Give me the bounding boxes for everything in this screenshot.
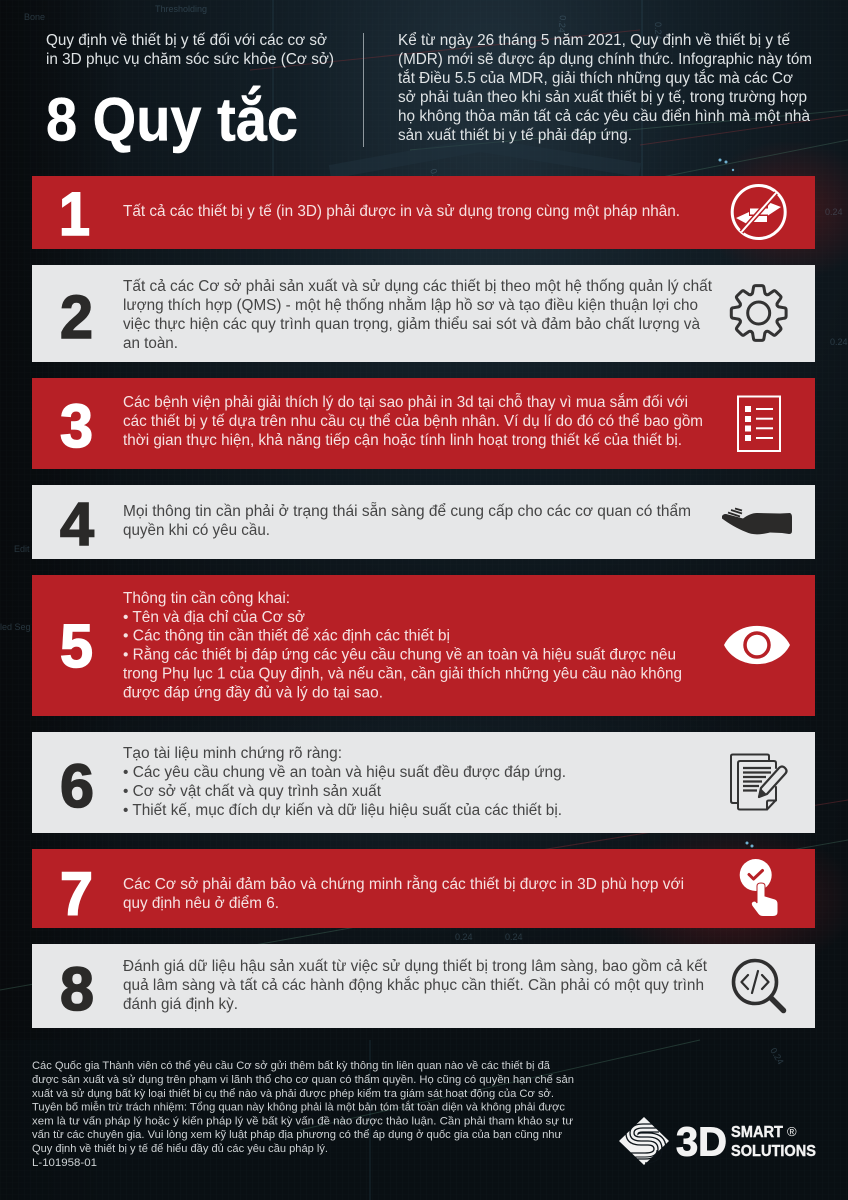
icon: open hand: [722, 508, 792, 534]
header: subtitle: [46, 32, 334, 68]
logo registered mark: ®: [787, 1124, 797, 1139]
rule 4 text: quyền khi có yêu cầu.: [123, 522, 270, 539]
rule 5 text: • Tên và địa chỉ của Cơ sở: [123, 609, 305, 626]
footer disclaimer text: Tuyên bố miễn trừ trách nhiệm: Tổng quan này không phải là một bản tóm tắt toàn diện và không phải được: [32, 1100, 565, 1114]
rule 2 text: Tất cả các Cơ sở phải sản xuất và sử dụng các thiết bị theo một hệ thống quản lý chất: [123, 278, 713, 295]
header divider: [363, 33, 364, 147]
footer disclaimer text: Các Quốc gia Thành viên có thể yêu cầu Cơ sở gửi thêm bất kỳ thông tin liên quan nào về các thiết bị đã: [32, 1060, 551, 1072]
number 1: 1: [59, 180, 90, 248]
rule 6 text: • Cơ sở vật chất và quy trình sản xuất: [123, 783, 382, 800]
background: dark technical scan interface: 0.24: [825, 207, 843, 217]
background: dark technical scan interface: Edit: [14, 544, 30, 554]
rule 2 text: [123, 278, 713, 352]
number 3: 3: [60, 392, 93, 460]
footer disclaimer text: xem là tư vấn pháp lý hoặc ý kiến pháp lý về bất kỳ vấn đề nào được thảo luận. Cần phải tham khảo sự tư: [32, 1116, 573, 1128]
header: subtitle: in 3D phục vụ chăm sóc sức khỏe (Cơ sở): [46, 51, 334, 68]
rule 5 text: [123, 590, 682, 702]
background: dark technical scan interface: 0.24: [455, 932, 473, 942]
icon: check and click hand: [740, 859, 778, 916]
rule 2 text: việc thực hiện các quy trình quan trọng, giảm thiểu sai sót và đảm bảo chất lượng và: [123, 316, 700, 333]
rule 3 text: Các bệnh viện phải giải thích lý do tại sao phải in 3d tại chỗ thay vì mua sắm đối với: [123, 394, 688, 411]
rule 5 text: Thông tin cần công khai:: [123, 590, 290, 607]
rule 7 text: quy định nêu ở điểm 6.: [123, 895, 279, 912]
rule 6 text: • Thiết kế, mục đích dự kiến và dữ liệu hiệu suất của các thiết bị.: [123, 802, 562, 819]
footer disclaimer text: xuất và sử dụng bất kỳ loại thiết bị cụ thể nào và phải được phép kiểm tra giám sát hoạt động của Cơ sở.: [32, 1088, 554, 1100]
footer disclaimer text: L-101958-01: [32, 1157, 97, 1169]
rule 3 text: các thiết bị y tế dựa trên nhu cầu cụ thể của bệnh nhân. Ví dụ lí do đó có thể bao gồm: [123, 413, 703, 430]
background: dark technical scan interface: 0.24: [653, 22, 663, 40]
logo: 3D Smart Solutions: [619, 1117, 816, 1165]
panel: rule 7: [32, 849, 815, 928]
rule 3 text: thời gian thực hiện, khả năng tiếp cận hoặc tính linh hoạt trong thiết kế của thiết bị.: [123, 432, 682, 449]
background: dark technical scan interface: 0.24: [556, 15, 568, 33]
rule 4 text: [123, 503, 691, 539]
icon: no transfer: [732, 186, 785, 238]
header: introduction text: (MDR) mới sẽ được áp dụng chính thức. Infographic này tóm: [398, 51, 812, 68]
title: 8 Quy tắc: [46, 86, 298, 154]
number 7: 7: [60, 860, 93, 928]
background: dark technical scan interface: 0.24: [830, 337, 848, 347]
rule 7 text: Các Cơ sở phải đảm bảo và chứng minh rằng các thiết bị được in 3D phù hợp với: [123, 876, 684, 893]
panel: rule 5: [32, 575, 815, 716]
background: dark technical scan interface: Thresholding: [155, 4, 207, 14]
logo mark: striped S diamond: [619, 1117, 669, 1165]
rule 6 text: [123, 745, 566, 819]
header: subtitle: Quy định về thiết bị y tế đối với các cơ sở: [46, 32, 327, 49]
logo wordmark: 3D: [676, 1118, 727, 1164]
rule 5 text: • Các thông tin cần thiết để xác định các thiết bị: [123, 628, 450, 644]
background: dark technical scan interface: Bone: [24, 12, 45, 22]
panel: rule 4: [32, 485, 815, 559]
rule 5 text: trong Phụ lục 1 của Quy định, và nếu cần, cần giải thích những yêu cầu nào không: [123, 666, 682, 682]
background: dark technical scan interface: 0.24: [768, 1046, 786, 1066]
rule 4 text: Mọi thông tin cần phải ở trạng thái sẵn sàng để cung cấp cho các cơ quan có thẩm: [123, 503, 691, 520]
header: introduction text: sở phải tuân theo khi sản xuất thiết bị y tế, trong trường hợp: [398, 89, 807, 106]
icon: magnifier with code: [734, 960, 784, 1010]
rule 8 text: đánh giá định kỳ.: [123, 996, 238, 1013]
panel: rule 8: [32, 944, 815, 1028]
header: introduction text: [398, 32, 812, 144]
number 4: 4: [60, 490, 94, 558]
logo text: solutions: SOLUTIONS: [731, 1143, 816, 1160]
panel: rule 3: [32, 378, 815, 469]
number 5: 5: [60, 612, 93, 680]
background: dark technical scan interface: 0.24: [428, 167, 444, 187]
rule 8 text: Đánh giá dữ liệu hậu sản xuất từ việc sử dụng thiết bị trong lâm sàng, bao gồm cả kết: [123, 958, 708, 975]
header: introduction text: Kể từ ngày 26 tháng 5 năm 2021, Quy định về thiết bị y tế: [398, 32, 790, 49]
rule 5 text: được đáp ứng đầy đủ và lý do tại sao.: [123, 684, 383, 702]
rule 1 text: Tất cả các thiết bị y tế (in 3D) phải được in và sử dụng trong cùng một pháp nhân.: [123, 203, 680, 220]
background: dark technical scan interface: 0.24: [505, 932, 523, 942]
logo text: smart: SMART: [731, 1124, 783, 1141]
icon: eye: [724, 626, 790, 664]
rule 2 text: lượng thích hợp (QMS) - một hệ thống nhằm lập hồ sơ và tạo điều kiện thuận lợi cho: [123, 297, 698, 314]
icon: document and pen: [731, 754, 786, 810]
footer disclaimer text: [32, 1060, 574, 1169]
rule 6 text: Tạo tài liệu minh chứng rõ ràng:: [123, 745, 342, 762]
rule 5 text: • Rằng các thiết bị đáp ứng các yêu cầu chung về an toàn và hiệu suất được nêu: [123, 646, 676, 664]
number 6: 6: [60, 752, 94, 820]
rule 2 text: an toàn.: [123, 335, 178, 352]
icon: gear: [731, 286, 786, 340]
panel: rule 6: [32, 732, 815, 833]
footer disclaimer text: được sản xuất và sử dụng trên phạm vi lãnh thổ cho cơ quan có thẩm quyền. Họ cũng có quyền hạn chế sản: [32, 1074, 574, 1086]
number 8: 8: [60, 955, 94, 1023]
header: introduction text: họ không thỏa mãn tất cả các yêu cầu điển hình mà một nhà: [398, 108, 810, 125]
header: introduction text: sản xuất thiết bị y tế phải đáp ứng.: [398, 127, 632, 144]
panel: rule 2: [32, 265, 815, 362]
rule 3 text: [123, 394, 703, 449]
rule 8 text: [123, 958, 708, 1013]
panel: rule 1: [32, 176, 815, 249]
footer disclaimer text: vấn từ các chuyên gia. Vui lòng xem kỹ luật pháp địa phương có thể áp dụng ở quốc gia của bạn cũng như: [32, 1129, 562, 1141]
icon: checklist: [738, 396, 780, 451]
rule 7 text: [123, 876, 684, 912]
footer disclaimer text: Quy định về thiết bị y tế để hiểu đầy đủ các yêu cầu pháp lý.: [32, 1143, 328, 1155]
background: dark technical scan interface: led Seg: [0, 622, 31, 632]
rule 8 text: quả lâm sàng và tất cả các hành động khắc phục cần thiết. Cần phải có một quy trình: [123, 977, 704, 994]
rule 6 text: • Các yêu cầu chung về an toàn và hiệu suất đều được đáp ứng.: [123, 764, 566, 781]
number 2: 2: [60, 283, 93, 351]
header: introduction text: tắt Điều 5.5 của MDR, giải thích những quy tắc mà các Cơ: [398, 70, 793, 87]
